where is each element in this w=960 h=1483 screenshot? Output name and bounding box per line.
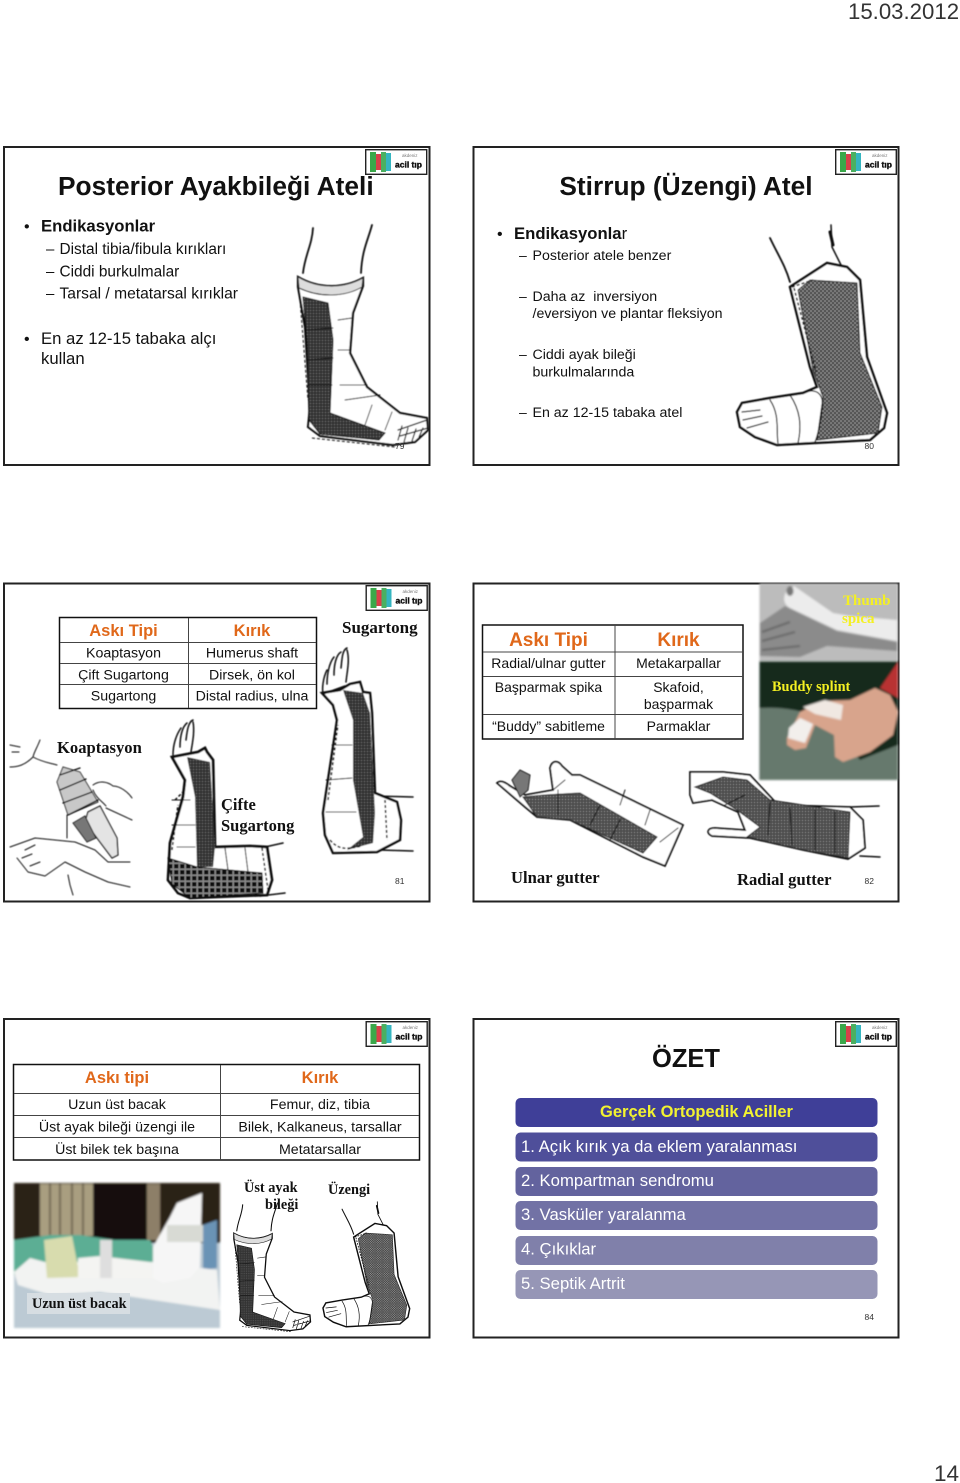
logo: acil tıp bbox=[395, 160, 422, 170]
bullet list: • bbox=[497, 226, 503, 243]
table: hand splint types: Parmaklar bbox=[647, 718, 711, 734]
logo: akdeniz bbox=[872, 1025, 888, 1030]
slide number: 82 bbox=[864, 876, 874, 886]
labels: Üzengi bbox=[328, 1181, 370, 1198]
table: leg splint types: Üst ayak bileği üzengi ile bbox=[39, 1118, 195, 1136]
labels: Çifte bbox=[221, 795, 256, 814]
bullet list: – bbox=[519, 404, 527, 420]
bullet list: – bbox=[46, 264, 55, 280]
bullet list: Endikasyonlar bbox=[514, 224, 628, 243]
bar: item 2 bbox=[516, 1167, 878, 1196]
photo: buddy splint: Buddy splint bbox=[772, 679, 851, 695]
bullet list: Endikasyonlar bbox=[41, 216, 156, 236]
labels bbox=[511, 868, 832, 889]
bar: item 5 bbox=[516, 1270, 878, 1299]
logo: akdeniz bbox=[402, 153, 418, 158]
logo: acil tıp bbox=[396, 596, 422, 606]
photo: thumb spica bbox=[760, 584, 898, 662]
table: arm splint types: Koaptasyon bbox=[86, 646, 161, 662]
table: arm splint types: Askı Tipi bbox=[89, 622, 158, 640]
table: hand splint types: başparmak bbox=[644, 696, 714, 712]
logo: acil tıp bbox=[865, 1032, 892, 1042]
table: leg splint types: Askı tipi bbox=[85, 1069, 149, 1087]
bar: heading bbox=[516, 1098, 878, 1127]
bar: item 3: 3. Vasküler yaralanma bbox=[521, 1205, 687, 1224]
table: hand splint types: “Buddy” sabitleme bbox=[492, 718, 605, 734]
bullet list: • bbox=[24, 331, 30, 348]
illustration: ulnar gutter bbox=[497, 762, 683, 866]
labels bbox=[57, 618, 418, 835]
labels: bileği bbox=[265, 1197, 298, 1213]
illustration: double sugartong arm bbox=[168, 720, 285, 898]
table: leg splint types: Bilek, Kalkaneus, tarsallar bbox=[238, 1120, 402, 1136]
illustration: stirrup splint bbox=[737, 225, 887, 445]
photo: thumb spica: Thumb bbox=[843, 593, 891, 609]
table: hand splint types: Radial/ulnar gutter bbox=[491, 655, 606, 671]
illustration: stirrup bbox=[323, 1202, 410, 1327]
table: arm splint types: Kırık bbox=[234, 622, 271, 640]
bullet list: – bbox=[46, 286, 55, 302]
bullet list: En az 12-15 tabaka atel bbox=[532, 405, 682, 421]
bar: item 2: 2. Kompartman sendromu bbox=[521, 1171, 714, 1190]
bar: item 5: 5. Septik Artrit bbox=[521, 1274, 625, 1293]
table: leg splint types: Kırık bbox=[302, 1069, 339, 1087]
labels bbox=[244, 1179, 370, 1213]
bar: item 4: 4. Çıkıklar bbox=[521, 1240, 597, 1258]
logo: akdeniz bbox=[402, 589, 419, 594]
bullet list: – bbox=[46, 241, 55, 258]
bar: heading: Gerçek Ortopedik Aciller bbox=[600, 1103, 794, 1121]
panel: summary bbox=[474, 1019, 898, 1338]
logo bbox=[836, 150, 896, 174]
table: leg splint types bbox=[14, 1064, 420, 1160]
bullet list: • bbox=[24, 218, 30, 236]
labels: Üst ayak bbox=[244, 1179, 298, 1196]
table: hand splint types: Skafoid, bbox=[653, 679, 704, 695]
bullet list bbox=[497, 224, 723, 421]
table: leg splint types: Femur, diz, tibia bbox=[270, 1097, 370, 1113]
bar: item 4 bbox=[516, 1236, 878, 1265]
table: leg splint types: Metatarsallar bbox=[279, 1142, 361, 1158]
bar: item 1 bbox=[516, 1132, 878, 1162]
panel: arm splints bbox=[4, 584, 430, 902]
bullet list: Posterior atele benzer bbox=[532, 248, 672, 264]
bullet list: – bbox=[519, 346, 527, 362]
logo: akdeniz bbox=[872, 153, 888, 158]
illustration: coaptation arm bbox=[10, 740, 132, 895]
table: arm splint types: Distal radius, ulna bbox=[196, 688, 308, 704]
bullet list bbox=[24, 216, 238, 368]
logo: acil tıp bbox=[396, 1032, 422, 1042]
photo: thumb spica: spica bbox=[842, 611, 875, 627]
logo: akdeniz bbox=[402, 1025, 419, 1030]
title: ÖZET bbox=[652, 1044, 720, 1073]
illustration: radial gutter bbox=[690, 772, 880, 859]
slide number: 84 bbox=[864, 1312, 874, 1322]
illustration: posterior ankle splint bbox=[298, 225, 428, 447]
labels: Koaptasyon bbox=[57, 738, 142, 757]
photo: long leg splint: Uzun üst bacak bbox=[32, 1296, 127, 1312]
bullet list: kullan bbox=[41, 349, 85, 368]
slide number: 79 bbox=[395, 441, 405, 451]
table: arm splint types bbox=[60, 618, 316, 708]
illustration: short leg splint bbox=[234, 1203, 311, 1332]
bullet list: Daha az inversiyon bbox=[532, 289, 657, 305]
bar: item 3 bbox=[516, 1201, 878, 1230]
bullet list: – bbox=[519, 247, 527, 263]
table: arm splint types: Çift Sugartong bbox=[78, 668, 169, 684]
photo: buddy splint bbox=[760, 662, 898, 780]
table: hand splint types: Kırık bbox=[657, 630, 700, 651]
panel: posterior ankle splint bbox=[4, 147, 430, 465]
slide number: 80 bbox=[864, 441, 874, 451]
table: hand splint types: Başparmak spika bbox=[495, 679, 602, 695]
table: leg splint types: Uzun üst bacak bbox=[68, 1097, 167, 1113]
logo bbox=[366, 586, 427, 610]
table: hand splint types: Metakarpallar bbox=[636, 655, 721, 671]
illustration: sugartong arm bbox=[322, 648, 413, 853]
panel: hand splints bbox=[474, 584, 898, 902]
table: hand splint types: Askı Tipi bbox=[509, 630, 588, 651]
logo bbox=[836, 1022, 896, 1046]
labels: Radial gutter bbox=[737, 870, 832, 889]
panel: stirrup splint bbox=[474, 147, 898, 465]
logo: acil tıp bbox=[865, 160, 892, 170]
table: arm splint types: Sugartong bbox=[91, 688, 156, 704]
photo: long leg splint bbox=[14, 1183, 220, 1328]
title: Stirrup (Üzengi) Atel bbox=[559, 171, 813, 201]
labels: Ulnar gutter bbox=[511, 868, 600, 887]
labels: Sugartong bbox=[221, 816, 295, 835]
bullet list: – bbox=[519, 288, 527, 304]
panel: leg splints bbox=[4, 1019, 430, 1338]
table: leg splint types: Üst bilek tek başına bbox=[55, 1140, 179, 1158]
bullet list: Ciddi ayak bileği bbox=[532, 347, 636, 363]
bar: item 1: 1. Açık kırık ya da eklem yaralanması bbox=[521, 1137, 797, 1156]
table: arm splint types: Dirsek, ön kol bbox=[209, 668, 295, 684]
slide number: 81 bbox=[395, 876, 405, 886]
bullet list: Ciddi burkulmalar bbox=[60, 264, 179, 280]
bullet list: Tarsal / metatarsal kırıklar bbox=[60, 286, 238, 302]
labels: Sugartong bbox=[342, 618, 418, 637]
bullet list: /eversiyon ve plantar fleksiyon bbox=[532, 306, 723, 322]
title: Posterior Ayakbileği Ateli bbox=[58, 171, 374, 201]
table: arm splint types: Humerus shaft bbox=[206, 646, 298, 662]
bullet list: En az 12-15 tabaka alçı bbox=[41, 329, 216, 348]
table: hand splint types bbox=[482, 625, 743, 739]
bullet list: burkulmalarında bbox=[532, 364, 634, 380]
logo bbox=[366, 150, 427, 174]
bullet list: Distal tibia/fibula kırıkları bbox=[60, 241, 226, 258]
logo bbox=[366, 1022, 427, 1046]
